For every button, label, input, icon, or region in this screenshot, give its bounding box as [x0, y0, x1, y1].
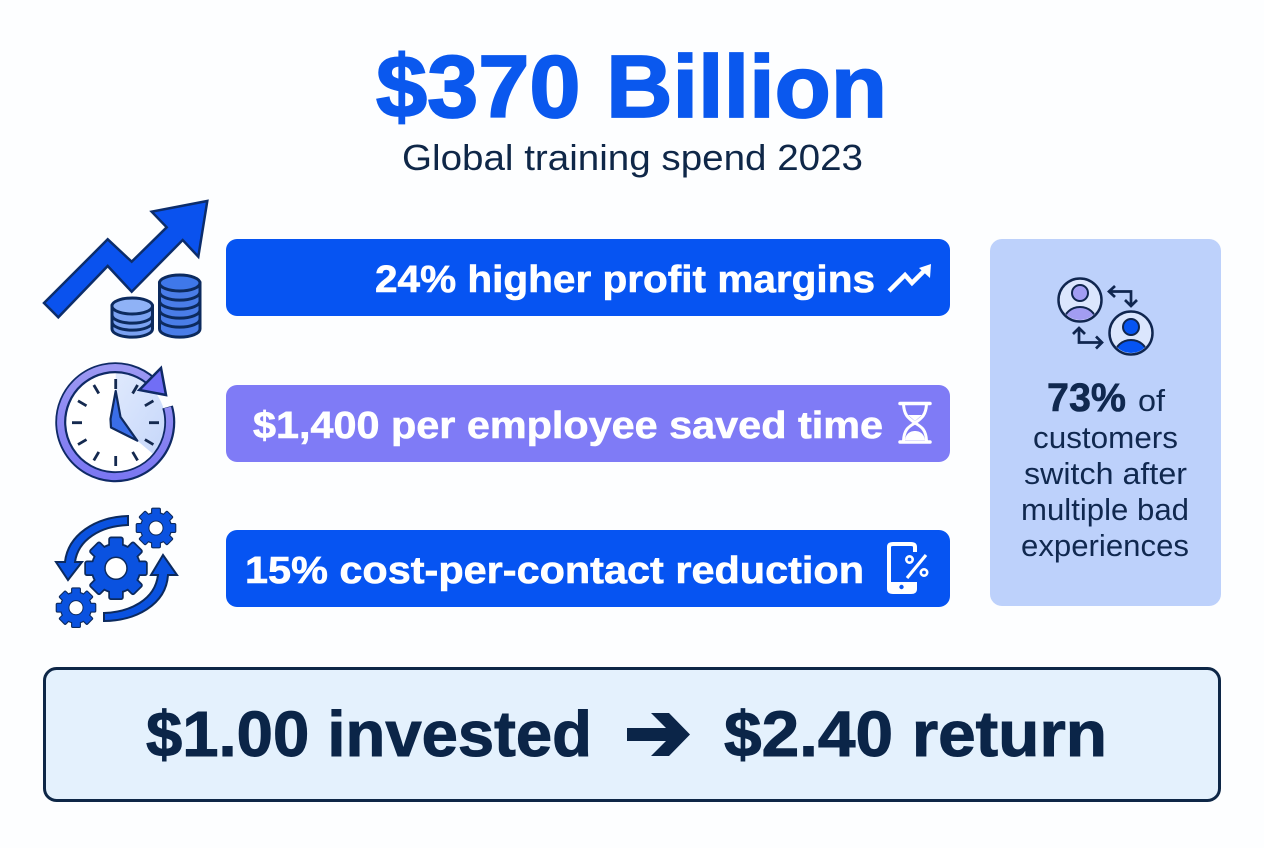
icon: rising arrow with coin stacks [44, 201, 207, 337]
callout: return on investment: $1.00 invested [146, 698, 592, 770]
icon: clock with circular arrow [61, 368, 170, 477]
callout: return on investment [44, 668, 1220, 800]
statistic text: 73% [1047, 376, 1126, 420]
statistic text: multiple bad [1021, 492, 1189, 527]
bar: profit margins [226, 239, 950, 316]
statistic text: switch after [1024, 456, 1187, 491]
statistic text: customers [1033, 420, 1178, 455]
bar: cost reduction: 15% cost-per-contact reduction [245, 550, 864, 592]
title: $370 Billion [376, 37, 887, 136]
icon: trend arrow [889, 264, 931, 291]
subtitle: Global training spend 2023 [402, 137, 863, 178]
icon: gears with cycle arrows [56, 509, 177, 627]
bar: cost reduction [226, 530, 950, 607]
callout: return on investment: $2.40 return [724, 698, 1107, 770]
arrow [627, 713, 690, 756]
icon: hourglass [900, 404, 930, 442]
bar: profit margins: 24% higher profit margins [375, 259, 875, 301]
bar: saved time: $1,400 per employee saved time [253, 405, 883, 447]
bar: saved time [226, 385, 950, 462]
statistic text: of [1138, 383, 1165, 418]
icon: phone with percent [889, 544, 927, 593]
statistic text: experiences [1021, 528, 1189, 563]
statistic text [1021, 376, 1189, 563]
panel: customer switching [990, 239, 1221, 606]
icon: customers swapping [1058, 278, 1152, 368]
